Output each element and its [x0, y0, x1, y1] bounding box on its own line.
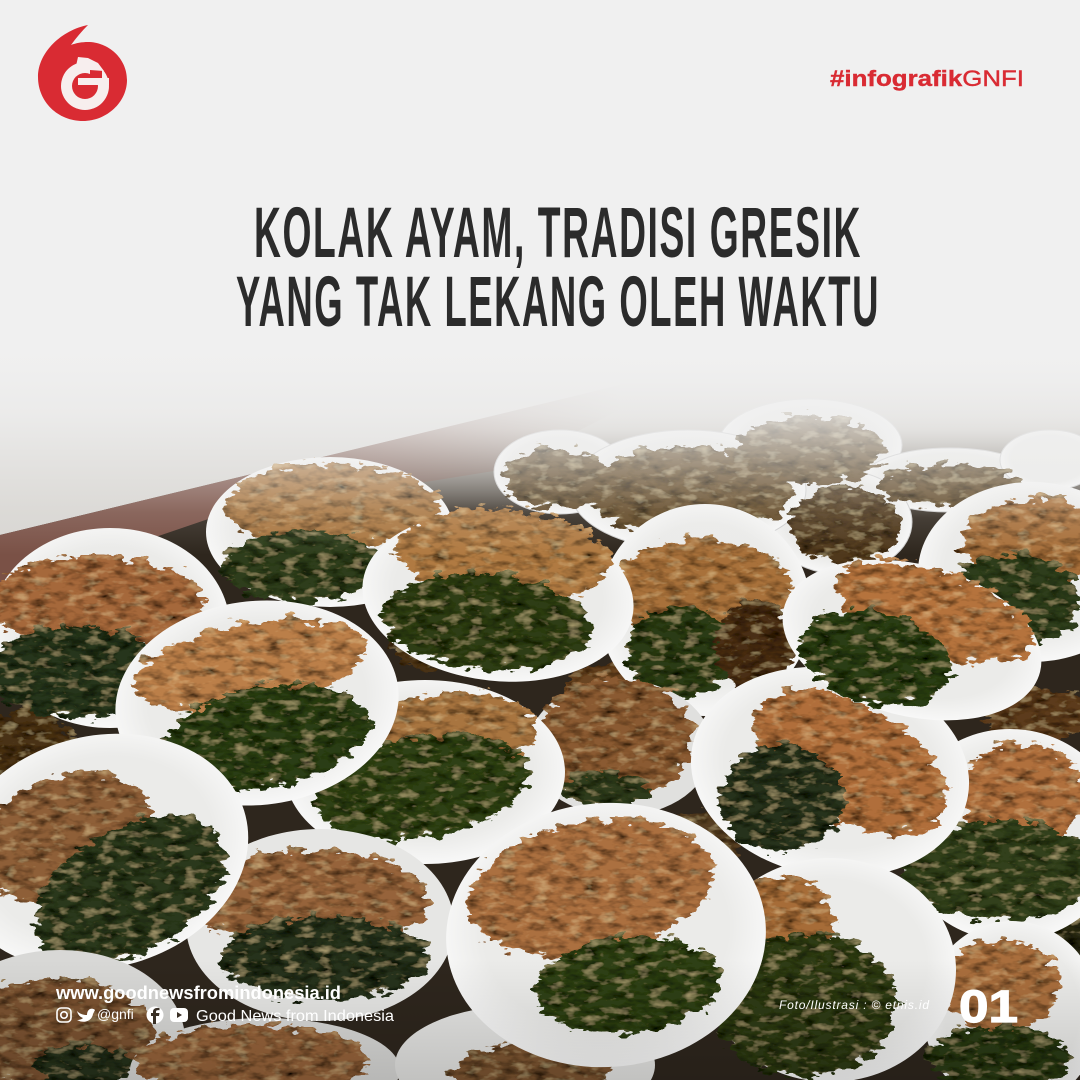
plate: centre lower	[285, 680, 565, 864]
title	[236, 194, 880, 342]
handle: @gnfi	[97, 1006, 134, 1022]
plate: lower middle	[186, 829, 454, 1021]
plate: left centre foreground	[105, 587, 409, 819]
plate: lower left	[0, 703, 274, 1001]
plate: right centre	[674, 645, 986, 899]
food shadows between plates	[0, 610, 1080, 990]
plate: bottom right	[704, 858, 956, 1080]
footer shade	[0, 960, 1080, 1080]
channel name: Good News from Indonesia	[196, 1008, 394, 1025]
icon: instagram	[57, 1008, 71, 1022]
plate: bottom far right	[924, 921, 1080, 1080]
plate: upper left	[206, 457, 454, 607]
icon: twitter	[77, 1009, 95, 1022]
plate: bottom edge	[130, 1005, 655, 1080]
icon: facebook	[146, 1006, 164, 1024]
plate: centre top	[354, 499, 642, 695]
plate: right lower	[898, 729, 1080, 941]
plate: left	[0, 528, 230, 728]
plate: far right	[918, 482, 1080, 662]
plate: right top	[766, 534, 1058, 746]
page number: 01	[959, 981, 1018, 1032]
hashtag: #infografik GNFI	[830, 66, 1024, 91]
plate: small centre	[528, 676, 712, 816]
top fade over photo	[0, 340, 1080, 555]
footer: website: www.goodnewsfromindonesia.id	[55, 983, 341, 1003]
photo credit: Foto/Ilustrasi : © etnis.id	[779, 998, 929, 1012]
logo: GNFI	[38, 25, 127, 121]
plate: tall centre right	[599, 504, 811, 716]
plate: bottom left	[0, 950, 185, 1080]
photo: plates of kolak ayam	[0, 340, 1080, 1080]
footer: social handles	[57, 1006, 394, 1025]
plate: front centre	[437, 792, 775, 1078]
icon: youtube	[170, 1008, 188, 1022]
